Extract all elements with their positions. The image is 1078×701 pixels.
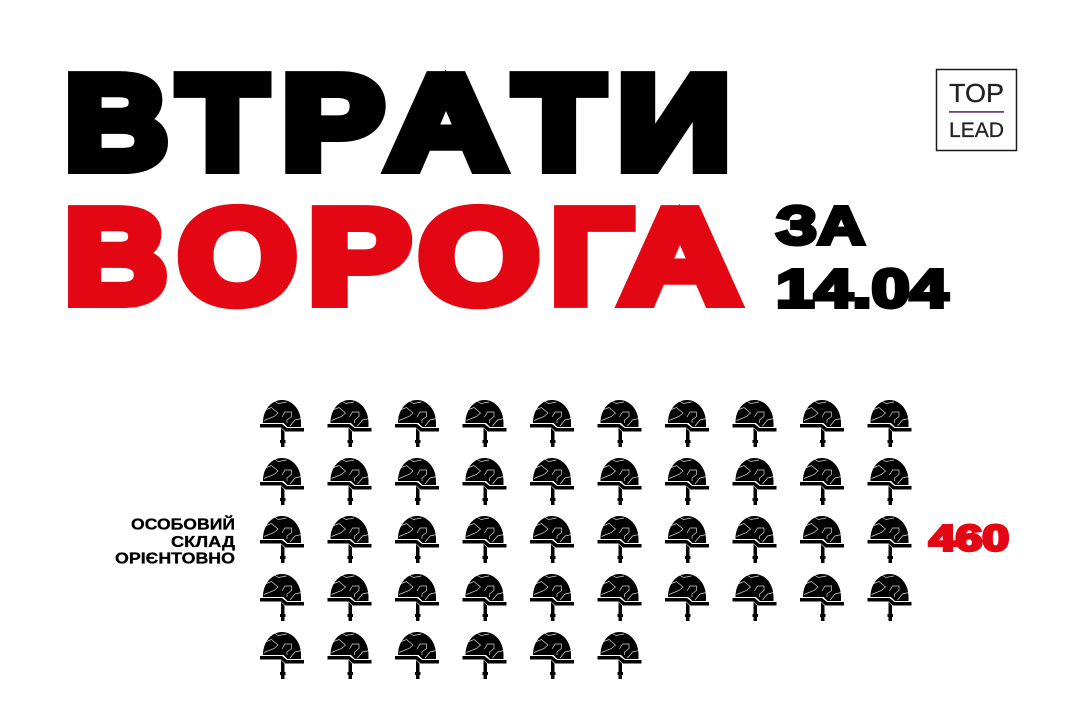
title: ВТРАТИ: Т xyxy=(178,49,266,196)
title: ВОРОГА: А xyxy=(621,183,739,330)
title: ВОРОГА: О xyxy=(178,183,296,330)
label: personnel approximately: ОРІЄНТОВНО xyxy=(115,550,235,568)
logo: Top Lead: LEAD xyxy=(949,119,1004,142)
label: personnel approximately xyxy=(115,516,235,568)
date heading: ЗА 14.04: ЗА xyxy=(776,196,865,256)
title: ВТРАТИ: И xyxy=(618,49,730,196)
logo: Top Lead xyxy=(936,70,1016,150)
title: ВТРАТИ: А xyxy=(387,49,505,196)
title: ВОРОГА: О xyxy=(419,183,539,330)
title: ВОРОГА: Р xyxy=(308,183,410,330)
label: personnel approximately: ОСОБОВИЙ xyxy=(131,516,235,534)
helmet grid: 46 icons xyxy=(260,400,912,679)
title: ВТРАТИ: Т xyxy=(514,49,604,196)
title: ВОРОГА xyxy=(65,183,739,330)
title: ВТРАТИ: В xyxy=(65,49,168,196)
label: personnel approximately: СКЛАД xyxy=(171,534,235,551)
logo: Top Lead: TOP xyxy=(949,78,1004,108)
date heading: ЗА 14.04: 14.04 xyxy=(776,259,948,319)
title: ВТРАТИ xyxy=(65,49,730,196)
title: ВОРОГА: Г xyxy=(551,183,632,330)
value: 460: 460 xyxy=(929,518,1009,558)
title: ВТРАТИ: Р xyxy=(282,49,384,196)
title: ВОРОГА: В xyxy=(65,183,167,330)
date heading: ЗА 14.04 xyxy=(776,196,948,319)
